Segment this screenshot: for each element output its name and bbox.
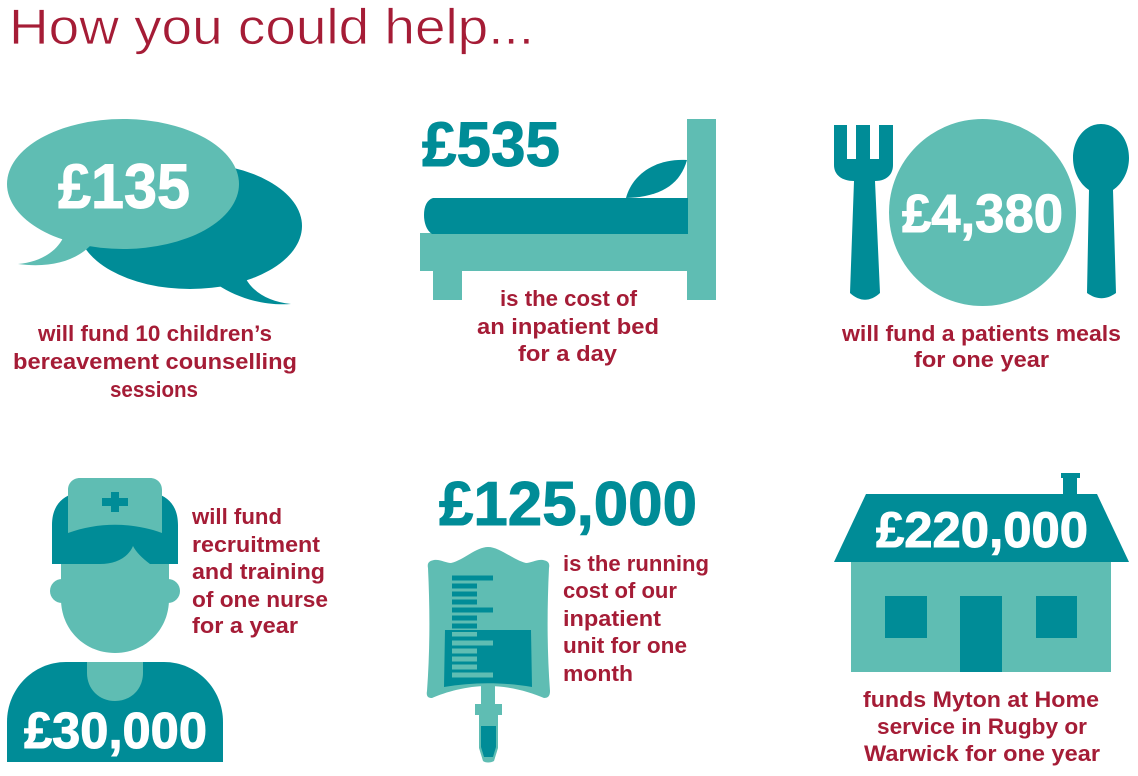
amount: £535: £535 bbox=[422, 110, 560, 180]
caption: Myton at Home: funds Myton at Home bbox=[863, 687, 1099, 712]
caption: counselling: bereavement counselling bbox=[13, 349, 297, 374]
caption: Myton at Home: service in Rugby or bbox=[877, 714, 1087, 739]
caption: meals bbox=[841, 321, 1121, 372]
caption: nurse: recruitment bbox=[192, 532, 321, 557]
caption: bed: an inpatient bed bbox=[477, 314, 659, 339]
caption: inpatient unit bbox=[563, 551, 709, 686]
caption: Myton at Home: Warwick for one year bbox=[864, 741, 1100, 766]
caption: nurse bbox=[191, 504, 328, 638]
icon: speech bubbles bbox=[7, 119, 302, 304]
caption: Myton at Home bbox=[863, 687, 1100, 766]
caption: nurse: will fund bbox=[191, 504, 282, 529]
icon: nurse bbox=[7, 478, 223, 762]
caption: inpatient unit: is the running bbox=[563, 551, 709, 576]
panel: counselling bbox=[7, 119, 302, 402]
icon: IV bag bbox=[427, 547, 550, 762]
panel: inpatient bed bbox=[420, 110, 716, 366]
panel: Myton at Home bbox=[834, 473, 1129, 766]
amount: £125,000: £125,000 bbox=[439, 470, 697, 539]
icon: fork bbox=[834, 125, 893, 300]
icon: plate bbox=[889, 119, 1076, 306]
amount: £135: £135 bbox=[58, 152, 190, 222]
caption: counselling bbox=[13, 321, 297, 402]
icon: house bbox=[834, 473, 1129, 672]
panel: inpatient unit bbox=[427, 470, 709, 762]
amount: £220,000: £220,000 bbox=[876, 502, 1088, 558]
caption: nurse: for a year bbox=[192, 613, 298, 638]
icon: bed bbox=[420, 119, 716, 300]
caption: bed bbox=[477, 286, 659, 366]
caption: bed: for a day bbox=[518, 341, 618, 366]
caption: meals: for one year bbox=[914, 347, 1049, 372]
icon: spoon bbox=[1073, 124, 1129, 298]
title: How you could help... bbox=[9, 0, 534, 55]
caption: inpatient unit: inpatient bbox=[563, 606, 662, 631]
amount: £4,380: £4,380 bbox=[902, 184, 1063, 244]
caption: counselling: will fund 10 children’s bbox=[37, 321, 272, 346]
caption: nurse: and training bbox=[192, 559, 325, 584]
caption: meals: will fund a patients meals bbox=[841, 321, 1121, 346]
caption: counselling: sessions bbox=[110, 377, 198, 402]
panel: nurse bbox=[7, 478, 328, 762]
caption: nurse: of one nurse bbox=[192, 587, 328, 612]
panel: meals bbox=[834, 119, 1129, 372]
caption: inpatient unit: cost of our bbox=[563, 578, 677, 603]
caption: inpatient unit: month bbox=[563, 661, 633, 686]
amount: £30,000: £30,000 bbox=[24, 702, 207, 759]
caption: inpatient unit: unit for one bbox=[563, 633, 687, 658]
caption: bed: is the cost of bbox=[500, 286, 638, 311]
